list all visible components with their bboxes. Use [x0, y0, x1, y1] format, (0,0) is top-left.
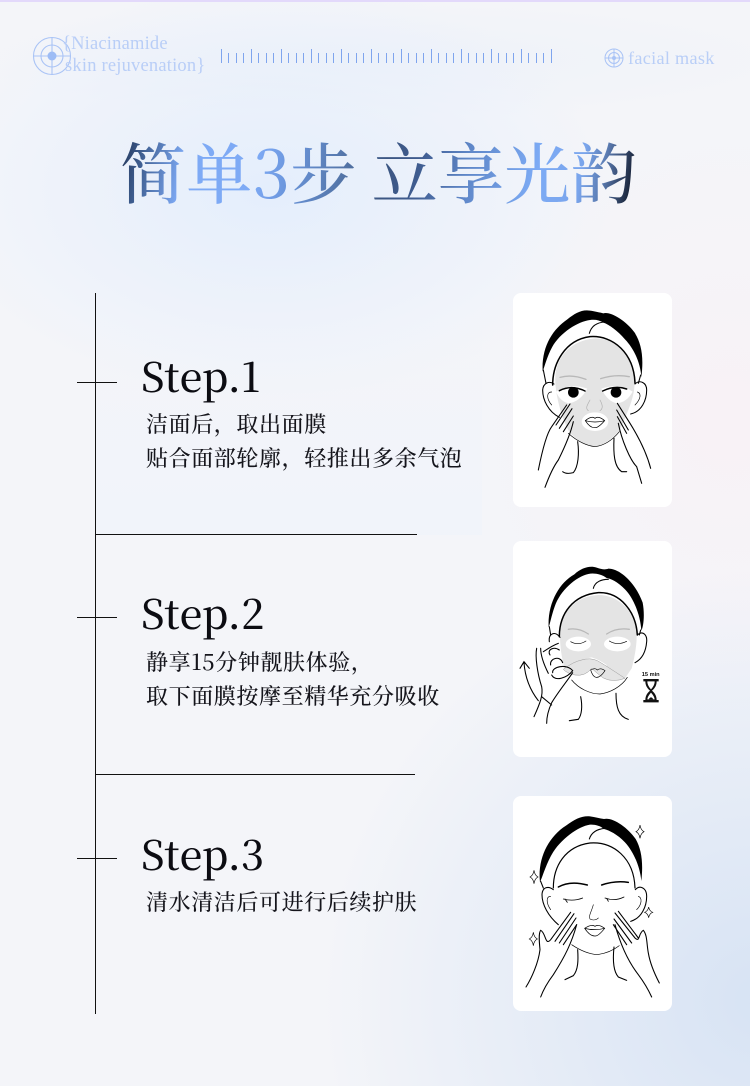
illustration: applying the mask	[538, 310, 652, 488]
step 1 image card	[513, 293, 672, 507]
soft panel glow behind step 1	[96, 320, 482, 535]
header: product tagline: {Niacinamide	[62, 34, 168, 54]
header: target emblem icon	[33, 37, 71, 75]
timeline vertical line	[95, 293, 96, 1014]
step 3 image card	[513, 796, 672, 1011]
step 3 marker	[77, 858, 117, 859]
step 3 description: 清水清洁后可进行后续护肤	[146, 886, 417, 917]
step 1 marker	[77, 382, 117, 383]
step 1 heading: Step.1	[141, 345, 260, 404]
header: ruler ticks	[221, 49, 552, 63]
step 2 image card	[513, 541, 672, 757]
illustration: rinsing and skincare	[526, 816, 660, 998]
hourglass timer	[642, 672, 660, 702]
hourglass timer: 15 min	[642, 672, 660, 678]
step 3 heading: Step.3	[141, 823, 264, 882]
step 1 description	[146, 408, 462, 473]
step 2 heading: Step.2	[141, 582, 264, 641]
sparkles	[529, 825, 653, 946]
step 2 marker	[77, 617, 117, 618]
divider after step 1	[96, 534, 417, 535]
step 1 description: 洁面后，取出面膜	[146, 408, 327, 439]
header: facial mask label: facial mask	[628, 48, 715, 68]
header: product tagline: skin rejuvenation}	[65, 56, 205, 76]
title: 简单3步 立享光韵	[120, 122, 637, 217]
step 2 description: 取下面膜按摩至精华充分吸收	[146, 680, 440, 711]
step 1 description: 贴合面部轮廓，轻推出多余气泡	[146, 442, 462, 473]
header: small target icon	[604, 48, 624, 68]
step 2 description	[146, 646, 440, 711]
top accent strip	[0, 0, 750, 2]
step 2 description: 静享15分钟靓肤体验，	[146, 646, 373, 677]
illustration: massaging after removing the mask	[520, 566, 660, 724]
header: product tagline	[62, 34, 205, 76]
divider after step 2	[96, 774, 415, 775]
